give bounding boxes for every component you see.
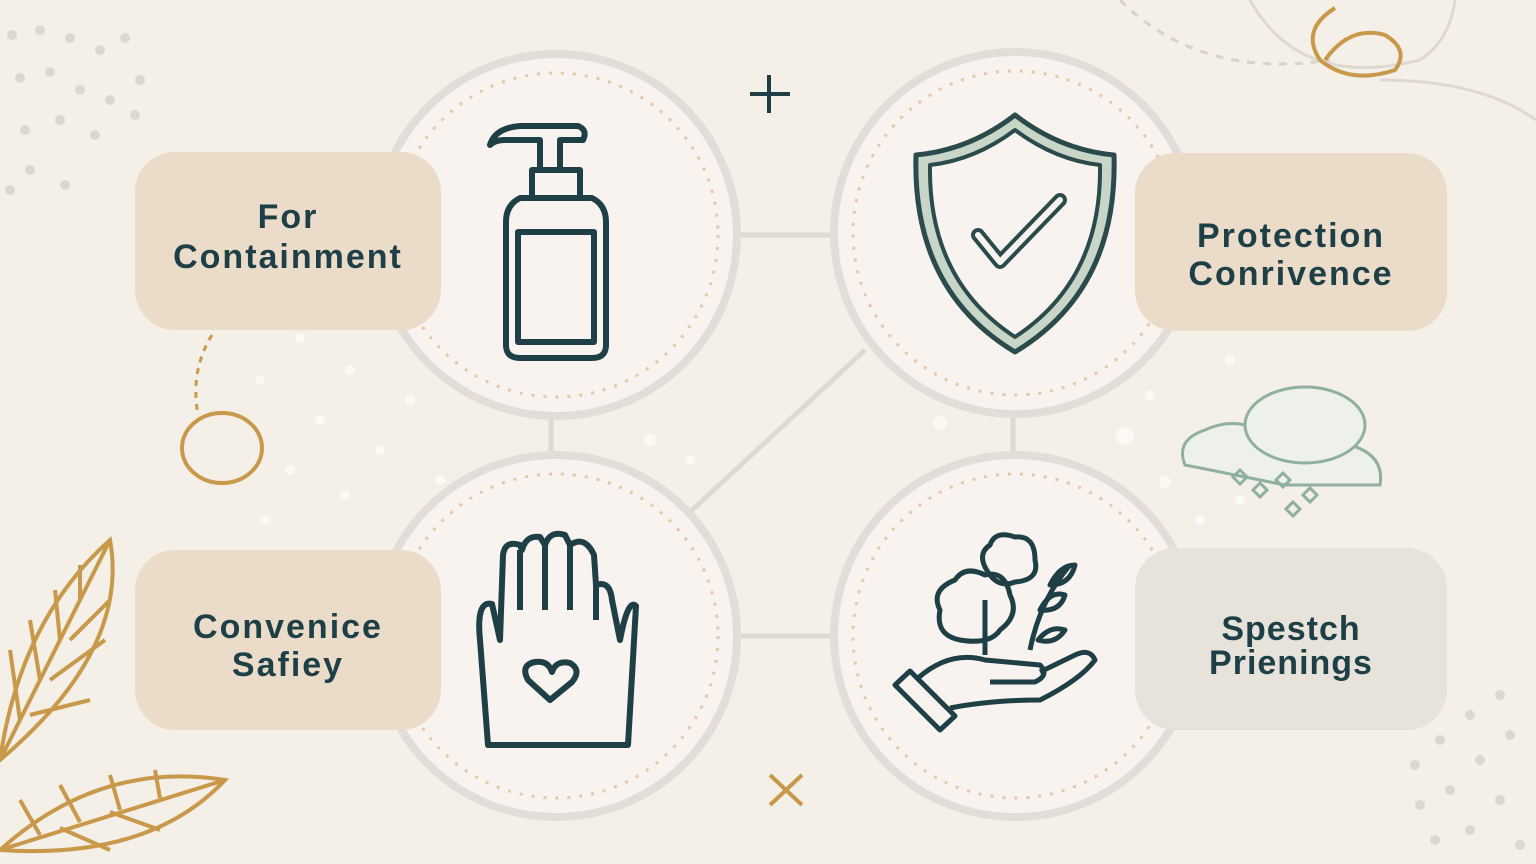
dots top-left [5, 25, 145, 195]
leaves [0, 540, 225, 851]
label: For Containment [135, 152, 441, 330]
label: For Containment: Containment [173, 238, 403, 276]
icon: shield [916, 115, 1114, 352]
plus [750, 75, 790, 113]
label: Protection Conrivence: Protection [1197, 217, 1385, 255]
label: Spestch Prienings: Spestch [1221, 610, 1361, 648]
label: Spestch Prienings: Prienings [1209, 644, 1373, 682]
label: Convenice Safiey [135, 550, 441, 730]
circles [375, 52, 1196, 817]
icon: pump bottle [490, 126, 606, 358]
gold loop left [196, 335, 212, 415]
label: Convenice Safiey: Safiey [232, 646, 344, 684]
label: Protection Conrivence: Conrivence [1188, 255, 1394, 293]
dots bottom-right [1410, 690, 1525, 850]
decorative arcs [1120, 0, 1330, 64]
icon: glove [479, 534, 636, 745]
connectors [551, 235, 1013, 636]
icon: hand with plant [895, 535, 1095, 730]
label: For Containment: For [258, 198, 318, 236]
label: Convenice Safiey: Convenice [193, 608, 383, 646]
icon: cloud [1182, 387, 1381, 516]
label: Protection Conrivence [1135, 153, 1447, 331]
gold loop top-right [1313, 8, 1401, 76]
label: Spestch Prienings [1135, 548, 1447, 730]
white dots middle [255, 333, 1245, 525]
x mark [770, 775, 802, 805]
